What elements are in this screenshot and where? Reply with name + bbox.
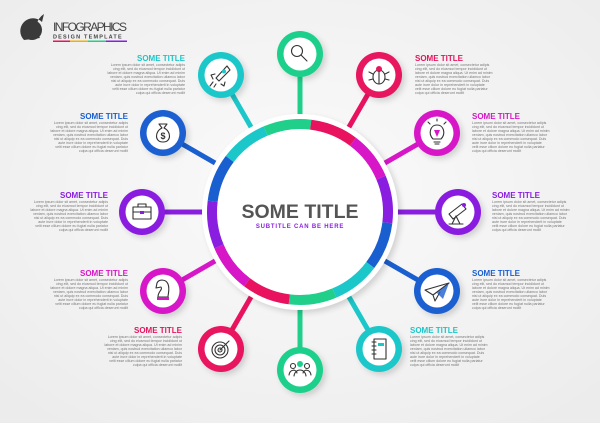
text: notebook (right): cing elit, sed do eiusmod tempor incididunt ut [410,339,482,343]
text: bug (right): culpa qui officia deserunt mollit [415,91,464,95]
text: telescope (right): veniam, quis nostrud exercitation ullamco labor [492,212,568,216]
text: plane (right): veniam, quis nostrud exercitation ullamco labor [472,290,548,294]
text: money (left): Lorem ipsum dolor sit amet, consectetur adipis [54,121,128,125]
text: telescope (right): labore et dolore magna aliqua. Ut enim ad minim [492,208,570,212]
text: telescope (right) [492,191,570,232]
text: telescope (right): culpa qui officia deserunt mollit [492,228,541,232]
text: notebook (right): velit esse cillum dolore eu fugiat nulla pariatur [410,359,484,363]
center circle: SUBTITLE CAN BE HERE [256,224,344,230]
logo [20,14,127,42]
text: chess (left): aute irure dolor in reprehenderit in voluptate [58,298,128,302]
text: rocket (left): aute irure dolor in reprehenderit in voluptate [115,83,185,87]
text: plane (right): velit esse cillum dolore eu fugiat nulla pariatur [472,302,546,306]
text: bulb (right) [472,112,550,153]
text: briefcase (left): velit esse cillum dolore eu fugiat nulla pariatur [35,224,109,228]
text: rocket (left): Lorem ipsum dolor sit amet, consectetur adipis [111,63,185,67]
text: briefcase (left): labore et dolore magna aliqua. Ut enim ad minim [30,208,108,212]
text: bug (right): nisi ut aliquip ex ea commodo consequat. Duis [415,79,489,83]
text: money (left) [50,112,129,153]
text: telescope (right): nisi ut aliquip ex ea commodo consequat. Duis [492,216,566,220]
text: money (left): veniam, quis nostrud exercitation ullamco labor [53,133,129,137]
text: chess (left): SOME TITLE [80,269,129,278]
text: telescope (right): SOME TITLE [492,191,541,200]
text: briefcase (left): SOME TITLE [60,191,109,200]
text: target (left): culpa qui officia deserunt mollit [133,363,182,367]
text: bug (right): SOME TITLE [415,54,464,63]
text: target (left): SOME TITLE [134,326,183,335]
center circle [177,89,423,335]
text: plane (right): nisi ut aliquip ex ea commodo consequat. Duis [472,294,546,298]
text: chess (left): veniam, quis nostrud exercitation ullamco labor [53,290,129,294]
text: plane (right): Lorem ipsum dolor sit amet, consectetur adipis [472,278,547,282]
text: rocket (left): veniam, quis nostrud exercitation ullamco labor [110,75,186,79]
text: bulb (right): velit esse cillum dolore eu fugiat nulla pariatur [472,145,546,149]
node: notebook [356,326,402,372]
node: money: $ [160,131,166,141]
text: telescope (right): Lorem ipsum dolor sit amet, consectetur adipis [492,200,567,204]
text: chess (left): labore et dolore magna aliqua. Ut enim ad minim [50,286,128,290]
text: bulb (right): nisi ut aliquip ex ea commodo consequat. Duis [472,137,546,141]
text: chess (left): culpa qui officia deserunt mollit [79,306,128,310]
text: briefcase (left): aute irure dolor in reprehenderit in voluptate [38,220,108,224]
text: chess (left): cing elit, sed do eiusmod tempor incididunt ut [56,282,128,286]
text: plane (right): SOME TITLE [472,269,521,278]
text: money (left): labore et dolore magna aliqua. Ut enim ad minim [50,129,128,133]
text: briefcase (left): veniam, quis nostrud exercitation ullamco labor [33,212,109,216]
node: people [277,347,323,393]
text: bulb (right): SOME TITLE [472,112,521,121]
text: rocket (left): labore et dolore magna aliqua. Ut enim ad minim [107,71,185,75]
text: bug (right): aute irure dolor in reprehenderit in voluptate [415,83,485,87]
text: plane (right): labore et dolore magna aliqua. Ut enim ad minim [472,286,550,290]
logo: DESIGN TEMPLATE [53,34,123,40]
text: plane (right) [472,269,550,310]
text: money (left): SOME TITLE [80,112,129,121]
text: money (left): cing elit, sed do eiusmod tempor incididunt ut [56,125,128,129]
text: plane (right): aute irure dolor in reprehenderit in voluptate [472,298,542,302]
text: rocket (left) [107,54,186,95]
node: money [140,110,186,156]
text: bulb (right): veniam, quis nostrud exercitation ullamco labor [472,133,548,137]
center circle: SOME TITLE [242,201,358,223]
text: plane (right): culpa qui officia deserunt mollit [472,306,521,310]
text: notebook (right): labore et dolore magna aliqua. Ut enim ad minim [410,343,488,347]
node: briefcase [119,189,165,235]
text: rocket (left): velit esse cillum dolore eu fugiat nulla pariatur [112,87,186,91]
node: plane [414,268,460,314]
text: money (left): nisi ut aliquip ex ea commodo consequat. Duis [54,137,128,141]
connectors [142,54,458,370]
text: briefcase (left): Lorem ipsum dolor sit amet, consectetur adipis [34,200,108,204]
text: bulb (right): Lorem ipsum dolor sit amet, consectetur adipis [472,121,547,125]
node: bug [356,52,402,98]
text: notebook (right) [410,326,488,367]
text: target (left): Lorem ipsum dolor sit amet, consectetur adipis [108,335,182,339]
text: rocket (left): cing elit, sed do eiusmod tempor incididunt ut [113,67,185,71]
text: notebook (right): culpa qui officia deserunt mollit [410,363,459,367]
node: bulb [414,110,460,156]
text: bug (right): velit esse cillum dolore eu fugiat nulla pariatur [415,87,489,91]
node: target [198,326,244,372]
text: bug (right): labore et dolore magna aliqua. Ut enim ad minim [415,71,493,75]
text: rocket (left): SOME TITLE [137,54,186,63]
text: target (left): velit esse cillum dolore eu fugiat nulla pariatur [109,359,183,363]
text: money (left): aute irure dolor in reprehenderit in voluptate [58,141,128,145]
text: target (left): nisi ut aliquip ex ea commodo consequat. Duis [108,351,182,355]
text: bulb (right): culpa qui officia deserunt mollit [472,149,521,153]
text: bug (right): cing elit, sed do eiusmod tempor incididunt ut [415,67,487,71]
text: notebook (right): Lorem ipsum dolor sit amet, consectetur adipis [410,335,485,339]
text: telescope (right): aute irure dolor in reprehenderit in voluptate [492,220,562,224]
text: telescope (right): velit esse cillum dolore eu fugiat nulla pariatur [492,224,566,228]
text: money (left): velit esse cillum dolore eu fugiat nulla pariatur [55,145,129,149]
text: bug (right): veniam, quis nostrud exercitation ullamco labor [415,75,491,79]
text: target (left): veniam, quis nostrud exercitation ullamco labor [107,347,183,351]
text: bulb (right): labore et dolore magna aliqua. Ut enim ad minim [472,129,550,133]
text: notebook (right): veniam, quis nostrud exercitation ullamco labor [410,347,486,351]
text: rocket (left): nisi ut aliquip ex ea commodo consequat. Duis [111,79,185,83]
text: chess (left): velit esse cillum dolore eu fugiat nulla pariatur [55,302,129,306]
text: notebook (right): nisi ut aliquip ex ea commodo consequat. Duis [410,351,484,355]
text: target (left): cing elit, sed do eiusmod tempor incididunt ut [110,339,182,343]
node: search [277,31,323,77]
text: target (left) [104,326,183,367]
logo: INFOGRAPHICS [53,20,127,34]
text: bug (right) [415,54,493,95]
text: rocket (left): culpa qui officia deserunt mollit [136,91,185,95]
text: bug (right): Lorem ipsum dolor sit amet, consectetur adipis [415,63,490,67]
text: chess (left): nisi ut aliquip ex ea commodo consequat. Duis [54,294,128,298]
text: bulb (right): cing elit, sed do eiusmod tempor incididunt ut [472,125,544,129]
node: rocket [198,52,244,98]
text: target (left): aute irure dolor in reprehenderit in voluptate [112,355,182,359]
text: plane (right): cing elit, sed do eiusmod tempor incididunt ut [472,282,544,286]
text: bulb (right): aute irure dolor in reprehenderit in voluptate [472,141,542,145]
text: notebook (right): aute irure dolor in reprehenderit in voluptate [410,355,480,359]
text: money (left): culpa qui officia deserunt mollit [79,149,128,153]
text: target (left): labore et dolore magna aliqua. Ut enim ad minim [104,343,182,347]
text: briefcase (left) [30,191,109,232]
text: chess (left): Lorem ipsum dolor sit amet, consectetur adipis [54,278,128,282]
node: telescope [435,189,481,235]
text: briefcase (left): nisi ut aliquip ex ea commodo consequat. Duis [34,216,108,220]
text: briefcase (left): culpa qui officia deserunt mollit [59,228,108,232]
text: briefcase (left): cing elit, sed do eiusmod tempor incididunt ut [36,204,108,208]
text: telescope (right): cing elit, sed do eiusmod tempor incididunt ut [492,204,564,208]
text: notebook (right): SOME TITLE [410,326,459,335]
text: chess (left) [50,269,129,310]
node: chess [140,268,186,314]
